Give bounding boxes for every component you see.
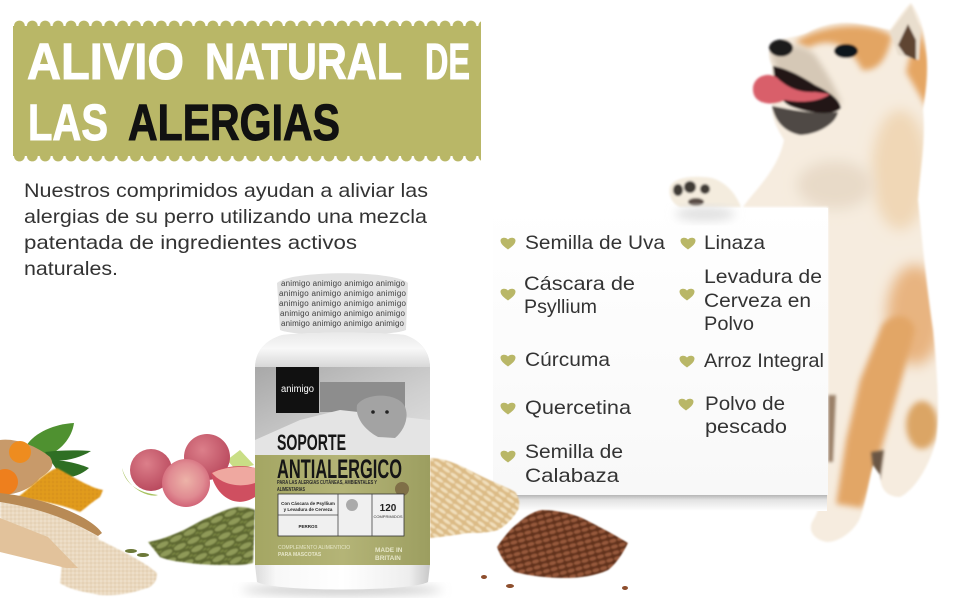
bottle cap: animigo animigo animigo animigo [281,319,405,328]
intro text: naturales. [24,258,118,280]
title line 1: DE [425,33,470,90]
ingredient: Linaza [680,232,765,254]
turmeric root, leaves and powder [0,423,103,512]
dog eye [834,44,858,58]
dog body and head [740,0,950,550]
dog open mouth [773,66,841,113]
product bottle [242,273,442,595]
title line 1: LAS [28,94,108,151]
ingredient: Cáscara de Psyllium: Cáscara de [524,273,635,295]
ingredient: Levadura de Cerveza en Polvo: Polvo [704,313,754,335]
dog tongue [753,75,830,104]
label info box [278,494,404,536]
dog illustration [669,0,950,550]
label info box: PERROS [298,524,318,529]
label olive band [255,455,430,565]
ingredient: Semilla de Calabaza: Calabaza [525,465,619,487]
label footer [278,545,403,562]
puppy in label [357,396,407,438]
bottle cap [277,273,408,335]
product name: ANTIALERGICO [277,454,402,484]
dog muzzle [770,45,842,105]
ingredient: Arroz Integral: Arroz Integral [704,350,824,372]
ingredient: Linaza: Linaza [704,232,765,254]
bottle cap: animigo animigo animigo animigo [279,289,407,298]
wooden scoop with yeast powder [0,493,157,595]
ingredient: Semilla de Uva: Semilla de Uva [525,232,665,254]
ingredient: Cáscara de Psyllium [500,273,635,318]
pumpkin seeds [125,507,255,565]
intro text: patentada de ingredientes activos [24,232,357,254]
dog nose [769,40,793,56]
ingredient: Polvo de pescado [678,393,787,438]
label footer: PARA MASCOTAS [278,552,322,558]
title banner [13,20,481,162]
ingredient: Cáscara de Psyllium: Psyllium [524,296,597,318]
ingredient: Quercetina: Quercetina [525,397,631,419]
brand square [276,367,319,413]
flax seeds [481,510,628,590]
ingredient: Polvo de pescado: Polvo de [705,393,785,415]
bottle cap: animigo animigo animigo animigo [279,299,407,308]
grapes [122,434,255,507]
brand square: animigo [281,384,314,395]
paw shadow [675,207,735,221]
label badge [395,482,409,496]
label info box: Con Cáscara de Psyllium [281,501,335,506]
ingredient: Polvo de pescado: pescado [705,416,787,438]
product subtitle [277,479,377,493]
label info box: 120 [380,503,397,514]
bottle cap: animigo animigo animigo animigo [281,279,406,288]
ingredient: Semilla de Calabaza [500,441,623,487]
rice [430,458,519,538]
ingredient: Levadura de Cerveza en Polvo: Cerveza en [704,290,811,312]
dog raised paw [669,177,741,207]
label footer: BRITAIN [375,555,401,562]
ingredient: Levadura de Cerveza en Polvo: Levadura de [704,266,822,288]
dog lower jaw [772,106,838,135]
product name: SOPORTE [277,430,346,455]
label footer: MADE IN [375,547,403,554]
label info box: COMPRIMIDOS [373,514,403,519]
ingredient: Semilla de Calabaza: Semilla de [525,441,623,463]
bottle cap: animigo animigo animigo animigo [280,309,406,318]
intro text [24,180,428,280]
title line 1 [27,33,470,151]
dog ear [890,5,921,60]
title highlighted word: ALERGIAS [128,94,340,151]
dog orange fur [795,26,892,70]
label photo [255,367,430,455]
label info box: y Levadura de Cerveza [284,507,333,512]
ingredient: Cúrcuma: Cúrcuma [525,349,610,371]
title line 1: ALIVIO [27,33,184,90]
label footer: COMPLEMENTO ALIMENTICIO [278,545,350,551]
product name [277,430,402,484]
bottle body [255,333,430,590]
product subtitle: PARA LAS ALERGIAS CUTÁNEAS, AMBIENTALES Y [277,479,377,486]
ingredient: Levadura de Cerveza en Polvo [680,266,822,335]
intro text: alergias de su perro utilizando una mezcla [24,206,427,228]
intro text: Nuestros comprimidos ayudan a aliviar las [24,180,428,202]
product subtitle: ALIMENTARIAS [277,487,305,493]
title line 1: NATURAL [205,33,402,90]
ingredient panel [493,207,828,511]
